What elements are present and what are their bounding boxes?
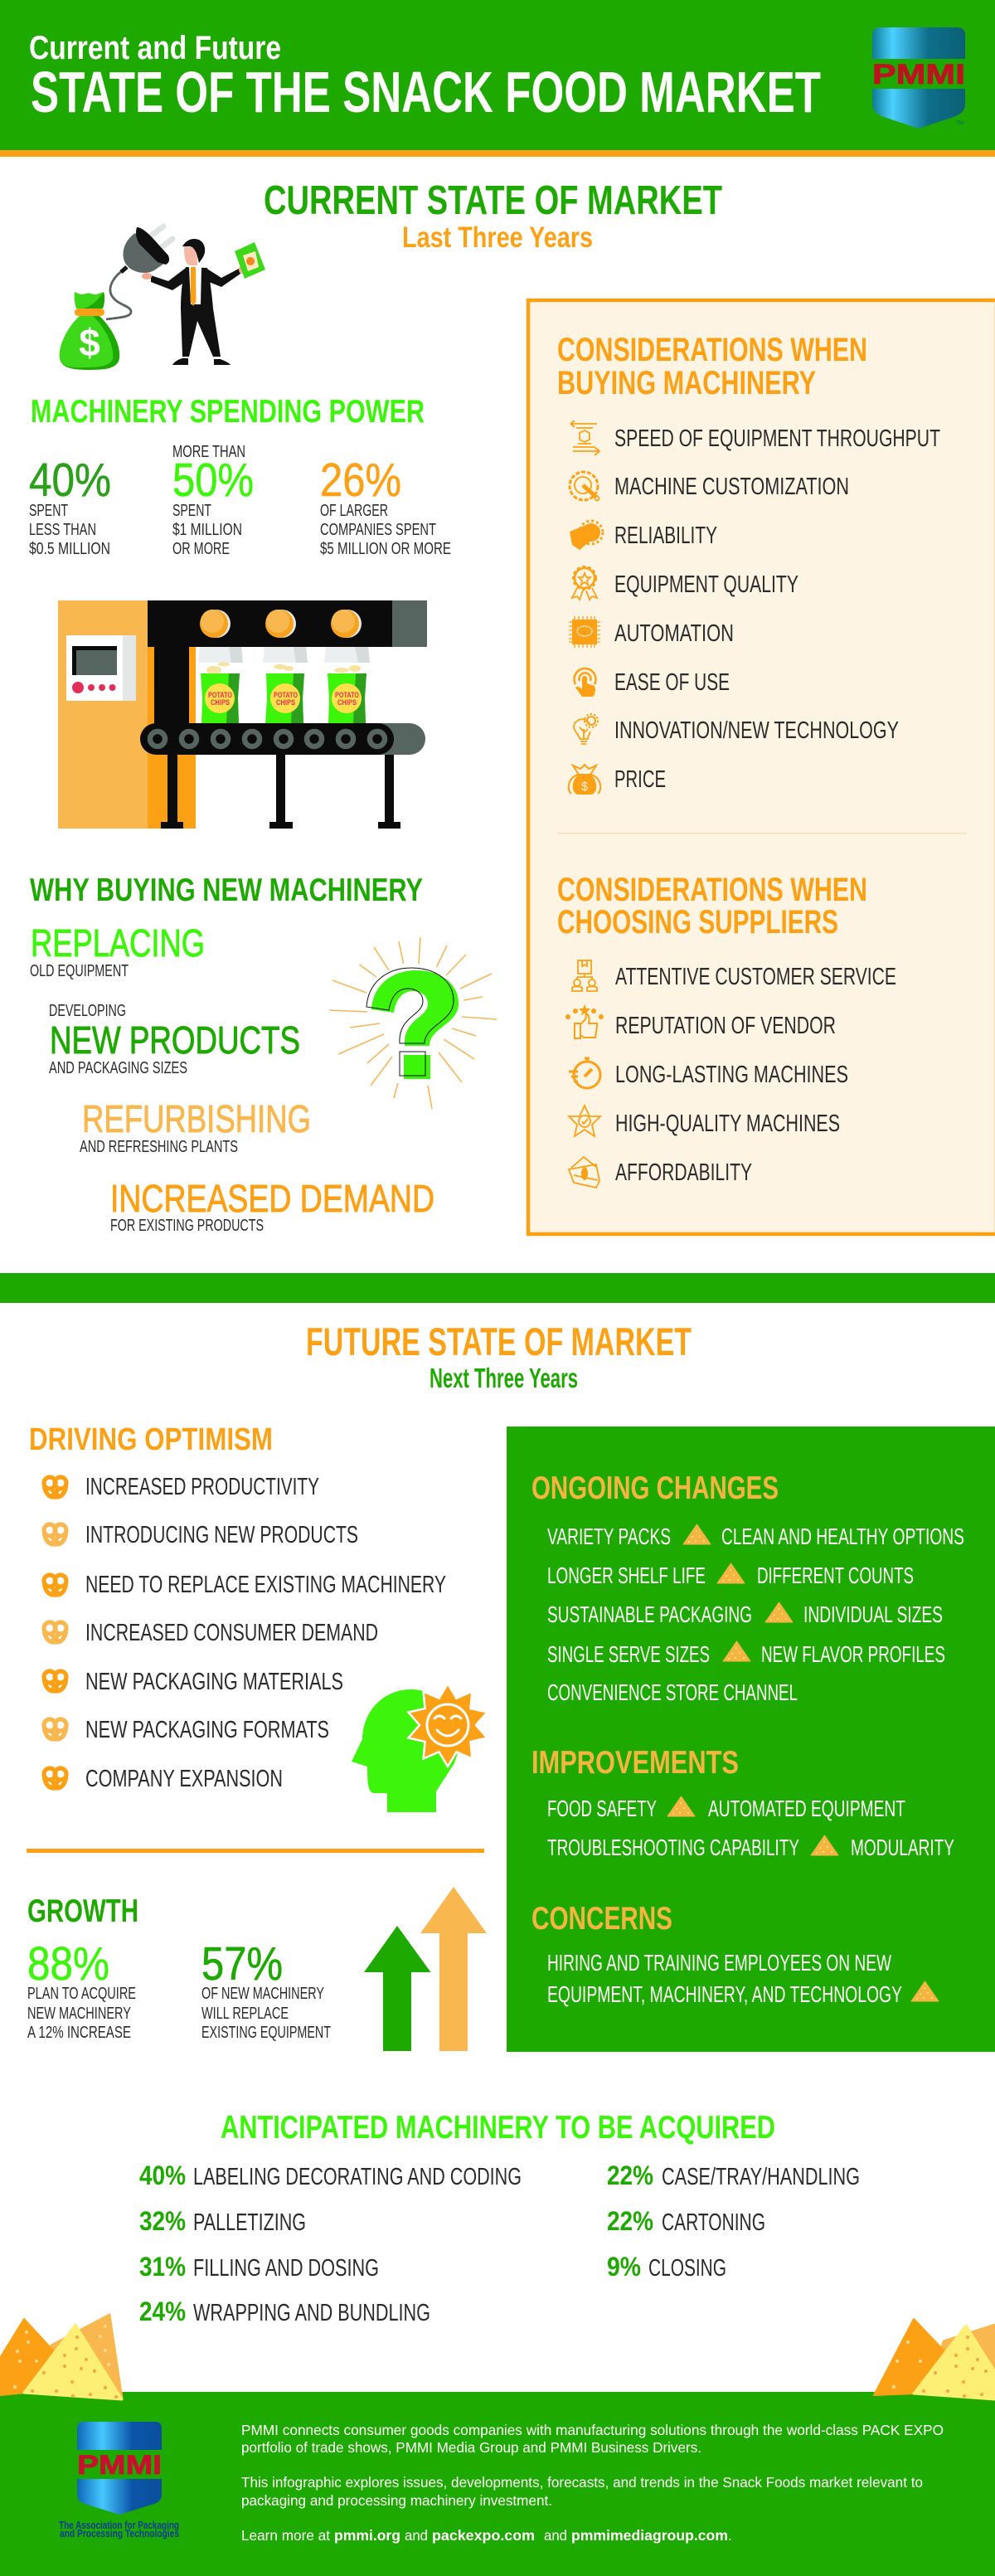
about text: pmmi.org [334, 2527, 400, 2544]
reason: increased demand: INCREASED DEMAND [110, 1177, 434, 1220]
dispenser rollers [200, 610, 362, 638]
chip bag: CHIPS [211, 698, 230, 707]
list: anticipated machinery right: 22% [607, 2160, 653, 2190]
list: supplier considerations: ATTENTIVE CUSTOMER SERVICE [615, 964, 896, 990]
icon: ease of use touch [574, 668, 595, 697]
list row: VARIETY PACKS [547, 1524, 671, 1549]
stat: 57% [201, 1937, 331, 2042]
list row: TROUBLESHOOTING CAPABILITY [547, 1835, 799, 1860]
heading: growth: GROWTH [27, 1893, 138, 1929]
list: driving optimism: NEW PACKAGING MATERIALS [85, 1669, 343, 1695]
list: anticipated machinery left: LABELING DECORATING AND CODING [193, 2164, 522, 2190]
logo: PMMI shield: TM [956, 121, 963, 126]
stat: 50%: 50% [172, 454, 254, 507]
stat: 50%: $1 MILLION [172, 521, 242, 539]
icon: reliability [570, 521, 603, 550]
reason: replacing: REPLACING [31, 921, 205, 965]
person [142, 239, 244, 365]
decoration: tortilla chips left [0, 2315, 122, 2399]
list row [547, 1524, 964, 1549]
reason: new products: NEW PRODUCTS [50, 1018, 300, 1062]
list: supplier considerations [615, 964, 896, 1186]
chip bag: CHIPS [337, 698, 357, 707]
reason: increased demand: FOR EXISTING PRODUCTS [110, 1217, 264, 1235]
stat: 88%: A 12% INCREASE [27, 2024, 131, 2042]
chip bag [201, 673, 240, 723]
heading: ongoing changes: ONGOING CHANGES [531, 1470, 779, 1506]
list: anticipated machinery left: FILLING AND DOSING [193, 2255, 379, 2282]
list row: AUTOMATED EQUIPMENT [708, 1796, 905, 1821]
list: anticipated machinery right: 9% [607, 2252, 641, 2282]
icon: automation chip [569, 616, 600, 648]
stat: 88% [27, 1937, 136, 2042]
icon: pretzel [44, 1524, 66, 1544]
list: anticipated machinery left: 31% [139, 2252, 186, 2282]
header banner [0, 0, 995, 157]
about text: and [544, 2527, 567, 2544]
icon: pretzel [44, 1477, 66, 1497]
heading: improvements: IMPROVEMENTS [531, 1745, 739, 1781]
list row: SINGLE SERVE SIZES [547, 1641, 710, 1667]
list: anticipated machinery left [139, 2160, 522, 2326]
icon: innovation bulb [574, 714, 598, 744]
concern text [547, 1950, 939, 2007]
list: driving optimism: INCREASED PRODUCTIVITY [85, 1474, 319, 1500]
stat: 50%: MORE THAN [172, 443, 245, 461]
icon: pretzel [44, 1622, 66, 1642]
icon: money bag [60, 292, 119, 370]
icon: customer service [572, 960, 597, 991]
list: anticipated machinery right: CASE/TRAY/HANDLING [662, 2164, 860, 2190]
about text: . [728, 2527, 732, 2544]
chip bag [265, 673, 304, 723]
heading: machinery spending power: MACHINERY SPENDING POWER [31, 394, 425, 430]
chip bag: CHIPS [276, 698, 295, 707]
list row: DIFFERENT COUNTS [757, 1563, 914, 1588]
chip bag: POTATO [335, 691, 359, 699]
list row [547, 1796, 905, 1821]
list: driving optimism: NEW PACKAGING FORMATS [85, 1717, 329, 1743]
icon: head with smiling sun [352, 1684, 488, 1812]
chip bag: POTATO [208, 691, 232, 699]
icon: money notes [569, 1157, 599, 1188]
stat: 40%: SPENT [29, 502, 68, 520]
stat: 26%: $5 MILLION OR MORE [320, 540, 451, 558]
stat: 26%: 26% [320, 454, 401, 507]
stat: 57%: EXISTING EQUIPMENT [201, 2024, 331, 2042]
list: driving optimism [44, 1474, 446, 1792]
reason: new products: DEVELOPING [49, 1002, 126, 1020]
list row: FOOD SAFETY [547, 1796, 657, 1821]
icon: pretzel [44, 1671, 66, 1691]
about text: Learn more at [241, 2527, 330, 2544]
stat: 57%: WILL REPLACE [201, 2005, 289, 2023]
icon: quality [572, 566, 597, 600]
list row [547, 1641, 945, 1667]
list row: SUSTAINABLE PACKAGING [547, 1601, 752, 1627]
reason: increased demand [110, 1177, 434, 1235]
icon: chip [667, 1796, 695, 1816]
icon: price bag: $ [581, 780, 589, 794]
stat: 88%: PLAN TO ACQUIRE [27, 1985, 136, 2003]
list: supplier considerations: LONG-LASTING MACHINES [615, 1062, 848, 1088]
footer logo: The Association for Packaging [59, 2519, 179, 2531]
reason: replacing: OLD EQUIPMENT [30, 962, 129, 980]
heading: buying machinery [557, 332, 867, 401]
about text: packexpo.com [432, 2527, 535, 2544]
panel: considerations [528, 300, 995, 1234]
illustration: businessman with plug, money bag and snack [60, 226, 265, 370]
footer [0, 2392, 995, 2576]
stat: 40%: LESS THAN [29, 521, 96, 539]
icon: chip [765, 1602, 793, 1622]
footer logo: PMMI [77, 2450, 162, 2480]
reason: new products: AND PACKAGING SIZES [49, 1059, 187, 1077]
section heading: current state [264, 178, 722, 254]
icon: pretzel [44, 1768, 66, 1788]
reason: replacing [30, 921, 205, 980]
icon: chip [811, 1835, 838, 1855]
icon: price bag [569, 765, 600, 795]
list row [547, 1563, 914, 1588]
divider band [0, 1273, 995, 1303]
list: supplier considerations: AFFORDABILITY [615, 1159, 752, 1186]
list: machinery considerations: RELIABILITY [614, 522, 717, 549]
list: anticipated machinery left: 24% [139, 2297, 186, 2326]
list: anticipated machinery right: CLOSING [648, 2255, 726, 2282]
logo: PMMI shield: PMMI [872, 59, 965, 90]
reason: refurbishing [80, 1097, 311, 1156]
heading: buying machinery: BUYING MACHINERY [557, 365, 816, 401]
about text: pmmimediagroup.com [571, 2527, 728, 2544]
icon: pretzel [44, 1719, 66, 1739]
icon: chip [911, 1981, 939, 2001]
stat: 57%: 57% [201, 1937, 283, 1990]
stat: 50%: OR MORE [172, 540, 230, 558]
footer logo: and Processing Technologies [60, 2527, 179, 2540]
reason: new products [49, 1002, 300, 1077]
funnels and chips [198, 647, 370, 674]
list: anticipated machinery left: 32% [139, 2206, 186, 2236]
list: anticipated machinery left: 40% [139, 2160, 186, 2190]
list: machinery considerations: INNOVATION/NEW TECHNOLOGY [614, 717, 899, 744]
control panel [66, 635, 136, 701]
icon: plug [124, 226, 172, 273]
heading: buying machinery: CONSIDERATIONS WHEN [557, 332, 867, 368]
reason: refurbishing: AND REFRESHING PLANTS [80, 1138, 238, 1156]
reason: refurbishing: REFURBISHING [82, 1097, 311, 1140]
logo: PMMI shield [872, 27, 965, 129]
icon: chip [723, 1641, 750, 1661]
icon: snack packet [235, 242, 265, 279]
header kicker: Current and Future [29, 30, 281, 66]
stat: 57%: OF NEW MACHINERY [201, 1985, 324, 2003]
stat: 50%: SPENT [172, 502, 211, 520]
heading: anticipated machinery: ANTICIPATED MACHINERY TO BE ACQUIRED [221, 2110, 775, 2146]
list: driving optimism: NEED TO REPLACE EXISTING MACHINERY [85, 1572, 446, 1598]
stat: 40%: $0.5 MILLION [29, 540, 110, 558]
stat: 40%: 40% [29, 454, 111, 507]
list: machinery considerations: PRICE [614, 766, 666, 793]
list row: CONVENIENCE STORE CHANNEL [547, 1679, 798, 1705]
icon: question mark with rays [329, 937, 497, 1109]
icon: chip [683, 1524, 711, 1544]
stat: 40% [29, 454, 111, 558]
heading: why buying new machinery: WHY BUYING NEW MACHINERY [30, 872, 423, 908]
about text: and [405, 2527, 428, 2544]
list: driving optimism: INCREASED CONSUMER DEMAND [85, 1620, 378, 1646]
list: driving optimism: COMPANY EXPANSION [85, 1766, 283, 1792]
icon: pretzel [44, 1575, 66, 1595]
icon: speed [570, 420, 599, 455]
stat: 26%: OF LARGER [320, 502, 388, 520]
list: supplier considerations: REPUTATION OF VENDOR [615, 1013, 836, 1039]
footer logo [59, 2422, 179, 2540]
list: machinery considerations [614, 425, 940, 793]
list: anticipated machinery right [607, 2160, 860, 2282]
stat: 50% [172, 443, 254, 558]
list: anticipated machinery right: 22% [607, 2206, 653, 2236]
list: anticipated machinery left: PALLETIZING [193, 2209, 306, 2236]
section subheading: Last Three Years [402, 221, 593, 254]
about text: portfolio of trade shows, PMMI Media Group and PMMI Business Drivers. [241, 2439, 701, 2456]
arrow: orange up [420, 1887, 487, 2051]
icon: quality star [569, 1106, 600, 1136]
stat: 88%: 88% [27, 1937, 109, 1990]
cable [106, 270, 131, 319]
section heading: future state: FUTURE STATE OF MARKET [306, 1320, 692, 1363]
heading: driving optimism: DRIVING OPTIMISM [29, 1422, 273, 1457]
panel: ongoing changes, improvements, concerns [507, 1427, 995, 2052]
chip bag [328, 673, 366, 723]
list: supplier considerations: HIGH-QUALITY MACHINES [615, 1111, 840, 1137]
heading: choosing suppliers: CHOOSING SUPPLIERS [557, 904, 838, 940]
conveyor belt [140, 723, 425, 829]
list: driving optimism: INTRODUCING NEW PRODUCTS [85, 1522, 358, 1548]
section heading: future state [306, 1320, 692, 1393]
stat: 88%: NEW MACHINERY [27, 2005, 131, 2023]
list row: LONGER SHELF LIFE [547, 1563, 706, 1588]
section heading: current state: CURRENT STATE OF MARKET [264, 178, 722, 223]
list: machinery considerations: AUTOMATION [614, 620, 734, 647]
about text [241, 2422, 944, 2544]
icon: customization [570, 472, 599, 501]
heading: choosing suppliers [557, 872, 867, 940]
arrow: green up [364, 1926, 431, 2051]
icon: reputation thumb and stars [565, 1004, 604, 1038]
list: machinery considerations: EASE OF USE [614, 669, 730, 696]
about text: PMMI connects consumer goods companies with manufacturing solutions through the world-class PACK EXPO [241, 2422, 944, 2438]
heading: choosing suppliers: CONSIDERATIONS WHEN [557, 872, 867, 908]
illustration: packaging machine with conveyor [58, 600, 427, 829]
about text: packaging and processing machinery investment. [241, 2492, 552, 2509]
heading: concerns: CONCERNS [531, 1901, 672, 1937]
list: anticipated machinery right: CARTONING [662, 2209, 765, 2236]
list: machinery considerations: EQUIPMENT QUALITY [614, 571, 798, 598]
icon: money bag: $ [79, 321, 100, 364]
stat: 26%: COMPANIES SPENT [320, 521, 436, 539]
list: machinery considerations: MACHINE CUSTOMIZATION [614, 474, 849, 500]
section subheading: Next Three Years [430, 1363, 578, 1393]
stat: 26% [320, 454, 451, 558]
chip bag: POTATO [274, 691, 298, 699]
list: anticipated machinery left: WRAPPING AND BUNDLING [193, 2300, 430, 2326]
icon: chip [717, 1563, 745, 1583]
about text: This infographic explores issues, developments, forecasts, and trends in the Snack Foods market relevant to [241, 2474, 923, 2491]
icon: stopwatch [569, 1058, 600, 1088]
decoration: tortilla chips right [874, 2319, 995, 2399]
